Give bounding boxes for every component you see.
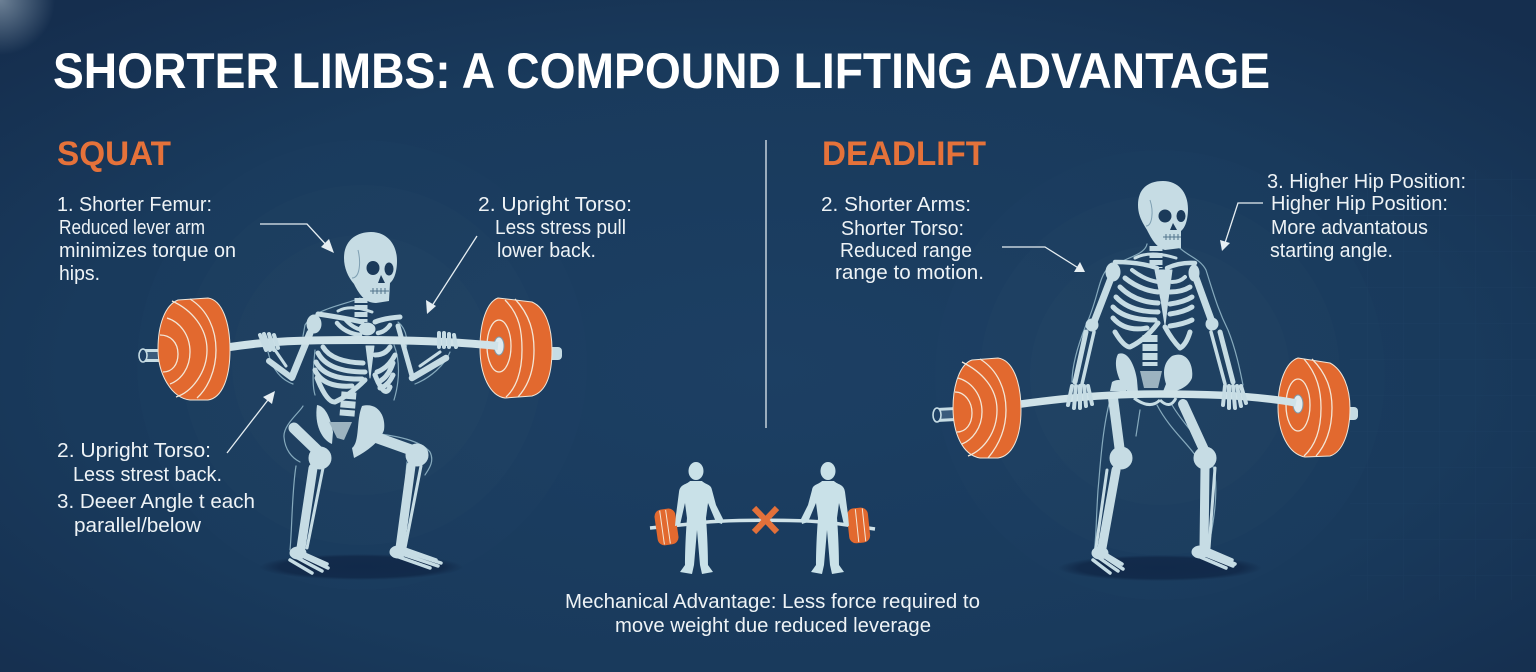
skull: [344, 232, 397, 303]
body outline: [1072, 244, 1243, 552]
body outline: [268, 298, 450, 550]
clavicles and shoulders: [307, 308, 400, 335]
text: squat upright torso top: [478, 194, 632, 262]
ribcage: [315, 318, 395, 402]
orange x: [754, 508, 777, 532]
right bar stub: [548, 347, 562, 360]
title: SHORTER LIMBS: A COMPOUND LIFTING ADVANTAGE: [53, 43, 1270, 99]
text: mechanical advantage caption: Mechanical Advantage: Less force required to: [565, 591, 980, 613]
right hand: [439, 333, 456, 347]
arms: [269, 326, 446, 378]
left plate: [953, 358, 1021, 458]
clavicles and shoulders: [1106, 254, 1199, 325]
ribcage: [1113, 270, 1192, 348]
heading: deadlift: DEADLIFT: [822, 135, 986, 173]
right plate: [1278, 358, 1350, 457]
text: deadlift higher hip: starting angle.: [1270, 240, 1393, 262]
divider: [765, 140, 767, 428]
text: squat upright torso lower and deeper angle: [57, 440, 255, 537]
skull: [1138, 181, 1188, 250]
illustration: deadlift skeleton: [933, 181, 1358, 581]
floor shadow: [259, 554, 463, 580]
arrow: shorter femur: [260, 224, 334, 253]
text: deadlift shorter arms: 2. Shorter Arms:: [821, 194, 971, 216]
text: squat upright torso top: lower back.: [497, 240, 596, 262]
text: squat upright torso top: 2. Upright Torso:: [478, 194, 632, 216]
left hand: [1068, 386, 1092, 408]
text: squat upright torso lower and deeper angle: 3. Deeer Angle t each: [57, 491, 255, 513]
illustration: mini lifters comparison: [650, 462, 875, 574]
mini left plate: [654, 508, 679, 546]
text: squat shorter femur: 1. Shorter Femur:: [57, 194, 212, 216]
arms: [1075, 278, 1233, 384]
text: deadlift higher hip: Higher Hip Position:: [1271, 193, 1448, 215]
right plate: [480, 298, 552, 398]
pelvis: [1110, 353, 1192, 405]
legs: [1096, 398, 1216, 548]
mini right figure: [801, 462, 849, 574]
legs: [294, 428, 428, 548]
text: squat upright torso lower and deeper angle: Less strest back.: [73, 464, 222, 486]
right bar stub: [1344, 407, 1358, 420]
feet: [1092, 546, 1235, 573]
mini left figure: [675, 462, 723, 574]
text: squat shorter femur: hips.: [59, 263, 100, 285]
spine: [347, 298, 361, 416]
arrow: upright torso lower: [227, 391, 275, 453]
left hand: [260, 334, 278, 350]
text: mechanical advantage caption: move weight due reduced leverage: [615, 615, 931, 637]
text: squat shorter femur: [57, 194, 236, 285]
text: deadlift higher hip: [1267, 171, 1466, 262]
feet: [290, 546, 441, 573]
text: squat upright torso lower and deeper angle: 2. Upright Torso:: [57, 440, 211, 462]
text: deadlift shorter arms: Reduced range: [840, 240, 972, 262]
text: squat shorter femur: Reduced lever arm: [59, 217, 205, 239]
text: squat shorter femur: minimizes torque on: [59, 240, 236, 262]
heading: squat: SQUAT: [57, 135, 171, 173]
text: deadlift shorter arms: range to motion.: [835, 262, 984, 284]
text: deadlift shorter arms: [821, 194, 984, 284]
text: deadlift higher hip: 3. Higher Hip Position:: [1267, 171, 1466, 193]
floor shadow: [1058, 555, 1262, 581]
barbell: [1021, 394, 1296, 404]
arrow: higher hip: [1220, 203, 1263, 251]
pelvis: [316, 405, 384, 458]
arrow: shorter arms: [1002, 247, 1085, 272]
left bar stub: [933, 406, 967, 422]
arrow: upright torso top: [426, 236, 477, 314]
barbell: [230, 340, 498, 347]
mini barbell: [650, 520, 875, 529]
left plate: [158, 298, 230, 400]
right hand: [1223, 386, 1246, 408]
text: squat upright torso lower and deeper angle: parallel/below: [74, 515, 202, 537]
left bar stub: [139, 349, 173, 362]
text: mechanical advantage caption: [565, 591, 980, 637]
text: squat upright torso top: Less stress pull: [495, 217, 626, 239]
text: deadlift shorter arms: Shorter Torso:: [841, 218, 964, 240]
illustration: squat skeleton: [139, 232, 562, 580]
text: deadlift higher hip: More advantatous: [1271, 217, 1428, 239]
spine: [1150, 246, 1156, 366]
mini right plate: [846, 507, 871, 544]
